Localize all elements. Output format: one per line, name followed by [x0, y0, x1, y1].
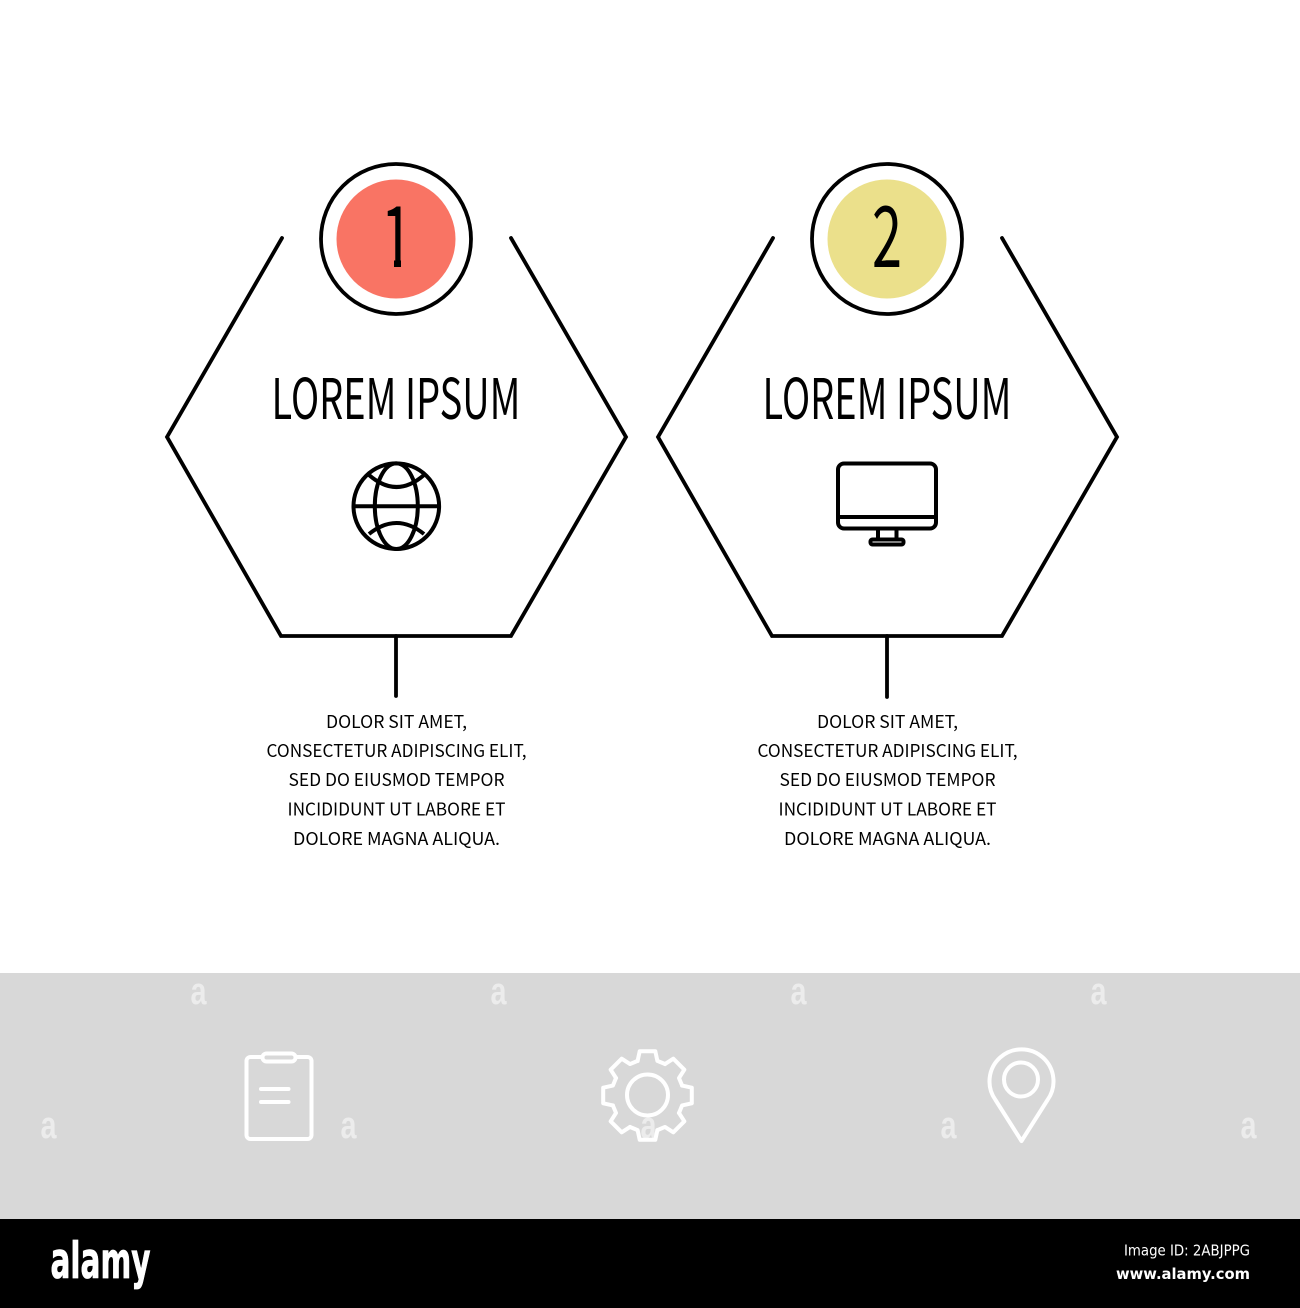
- watermark marks: a: [40, 1105, 57, 1147]
- number badge 1: 1: [381, 169, 413, 292]
- hexagon outline 1: [167, 238, 626, 636]
- icon: clipboard: [246, 1054, 312, 1139]
- text block 2: [758, 709, 1018, 851]
- watermark marks: a: [1240, 1105, 1257, 1147]
- text block 1: INCIDIDUNT UT LABORE ET: [288, 796, 506, 822]
- hexagon outline 2: [658, 238, 1117, 636]
- text block 2: SED DO EIUSMOD TEMPOR: [780, 767, 996, 792]
- panel: grey icon band: [0, 971, 1300, 1219]
- text block 2: DOLORE MAGNA ALIQUA.: [784, 826, 991, 851]
- heading 1: LOREM IPSUM: [272, 355, 520, 436]
- text block 1: CONSECTETUR ADIPISCING ELIT,: [266, 738, 526, 763]
- connector line 2: [885, 636, 889, 697]
- site url: www.alamy.com: [1116, 1265, 1250, 1283]
- watermark marks: [40, 971, 1257, 1147]
- text block 2: INCIDIDUNT UT LABORE ET: [778, 796, 996, 822]
- icon: gear: [603, 1051, 692, 1140]
- watermark marks: a: [1090, 971, 1107, 1013]
- icon: monitor: [838, 464, 936, 544]
- watermark marks: a: [790, 971, 807, 1013]
- icon: globe: [354, 463, 439, 549]
- watermark marks: a: [340, 1105, 357, 1147]
- panel: footer bar: [0, 1219, 1300, 1308]
- text block 1: DOLORE MAGNA ALIQUA.: [293, 826, 500, 851]
- watermark marks: a: [190, 971, 207, 1013]
- text block 1: DOLOR SIT AMET,: [326, 709, 467, 734]
- number badge 1: [321, 164, 471, 314]
- text block 2: DOLOR SIT AMET,: [817, 709, 958, 734]
- number badge 2: 2: [872, 169, 902, 292]
- text block 2: CONSECTETUR ADIPISCING ELIT,: [758, 738, 1018, 763]
- connector line 1: [394, 636, 398, 696]
- heading 2: LOREM IPSUM: [762, 355, 1012, 436]
- panel: step 1: [167, 164, 626, 851]
- icon: map pin: [990, 1049, 1054, 1141]
- number badge 2: [812, 164, 962, 314]
- logo text: alamy: [50, 1232, 150, 1290]
- watermark marks: a: [940, 1105, 957, 1147]
- image id: Image ID: 2ABJPPG: [1124, 1242, 1250, 1260]
- watermark marks: a: [490, 971, 507, 1013]
- panel: step 2: [658, 164, 1117, 851]
- text block 1: [266, 709, 526, 851]
- text block 1: SED DO EIUSMOD TEMPOR: [288, 767, 504, 792]
- watermark marks: a: [640, 1105, 657, 1147]
